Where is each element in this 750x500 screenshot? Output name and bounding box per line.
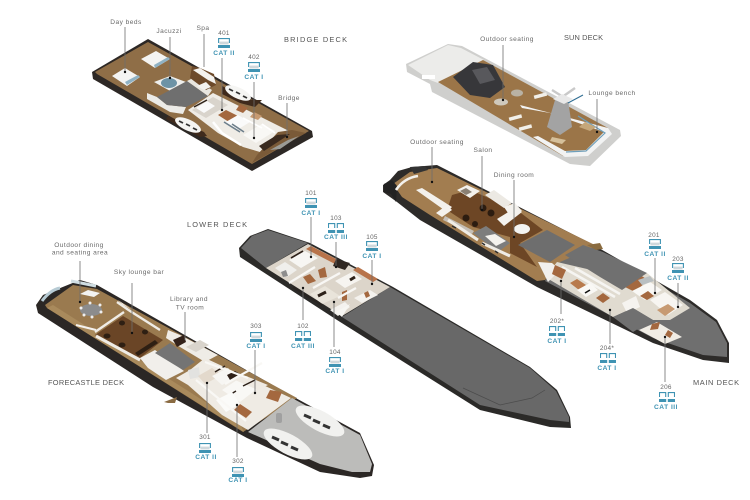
cabin tag: 206: 206 [660, 384, 672, 391]
label: salon: Salon [473, 147, 493, 154]
cabin tag: 105 [362, 234, 382, 285]
label: outdoor seating (main) [410, 139, 464, 183]
label: outdoor dining: Outdoor dining [54, 242, 104, 249]
cabin tag: 204 [597, 309, 617, 372]
cabin tag: 203: 203 [672, 256, 684, 263]
forecastle lower walkway [47, 305, 244, 432]
sun deck hull [406, 44, 621, 166]
main deck salon floor [447, 190, 543, 267]
cabin tag: 102 [291, 287, 315, 350]
sun deck canopy frame [408, 45, 484, 83]
bridge room [252, 130, 306, 163]
forecastle cabins [176, 358, 291, 430]
bridge deck spa [190, 66, 216, 90]
main deck salon furniture [436, 185, 530, 256]
label: sky lounge bar: Sky lounge bar [114, 269, 164, 276]
lower deck cabins [266, 244, 390, 317]
panel: main deck [383, 165, 729, 363]
bridge deck jacuzzi [154, 76, 186, 92]
cabin tag: 303: CAT I [246, 343, 266, 350]
label: bridge: Bridge [278, 95, 300, 102]
cabin tag: 303: 303 [250, 323, 262, 330]
main deck cabin 206 [639, 322, 682, 344]
lower deck stern plating [241, 230, 308, 268]
forecastle library [166, 330, 218, 362]
cabin tag: 201 [644, 232, 666, 294]
sun deck tables and loungers [494, 90, 596, 144]
forecastle tenders [259, 399, 349, 466]
label: spa [196, 25, 210, 67]
bridge deck grey roof [147, 78, 212, 114]
forecastle grey lounge roof [140, 343, 195, 380]
cabin tag: 102: CAT III [291, 343, 315, 350]
panel: sun deck [406, 44, 621, 166]
forecastle aft bench [42, 288, 60, 301]
sun deck mast [547, 88, 583, 135]
forecastle teak [45, 285, 297, 432]
cabin tag: 303 [246, 323, 266, 394]
cabin tag: 206 [654, 336, 678, 411]
cabin tag: 103 [324, 215, 348, 268]
heading: sun deck: SUN DECK [564, 33, 603, 42]
label: outdoor seating (sun): Outdoor seating [480, 36, 534, 43]
cabin tag: 203: CAT II [667, 275, 689, 282]
forecastle bow plating [248, 398, 372, 472]
cabin tag: 101: 101 [305, 190, 317, 197]
main deck grey plating base [545, 246, 727, 357]
bridge deck cabins [188, 93, 293, 152]
cabin tag: 103: 103 [330, 215, 342, 222]
bridge deck hull [92, 39, 313, 171]
label: jacuzzi: Jacuzzi [156, 28, 182, 35]
label: lounge bench [588, 90, 636, 133]
cabin tag: 401 [213, 30, 235, 111]
cabin tag: 102: 102 [297, 323, 309, 330]
forecastle fittings [164, 397, 177, 403]
label: outdoor seating (sun) [480, 36, 534, 101]
label: day beds [110, 19, 142, 73]
cabin tag: 101 [301, 190, 321, 258]
cabin tag: 302 [228, 404, 248, 484]
cabin tag: 201: 201 [648, 232, 660, 239]
label: bridge [278, 95, 300, 138]
label: dining room: Dining room [494, 172, 534, 179]
main deck stern fitting [384, 180, 397, 202]
sun deck teak floor [438, 60, 608, 156]
cabin tag: 204: 204* [600, 345, 614, 352]
sun deck dark canopy [453, 62, 505, 98]
panel: lower deck [239, 229, 571, 428]
cabin tag: 104: CAT I [325, 368, 345, 375]
cabin tag: 202: 202* [550, 318, 564, 325]
cabin tag: 201: CAT II [644, 251, 666, 258]
label: dining room [494, 172, 534, 238]
cabin tag: 202: CAT I [547, 338, 567, 345]
cabin tag: 203 [667, 256, 689, 308]
label: outdoor seating (main): Outdoor seating [410, 139, 464, 146]
lower deck hull [239, 229, 571, 428]
label: jacuzzi [156, 28, 182, 79]
forecastle hull [36, 280, 374, 478]
lower deck main plating [342, 287, 569, 422]
cabin tag: 401: 401 [218, 30, 230, 37]
label: outdoor dining [52, 242, 108, 303]
label: lounge bench: Lounge bench [588, 90, 636, 97]
forecastle lounge floor and furniture [76, 300, 163, 360]
bridge deck teak [95, 42, 309, 164]
cabin tag: 302: 302 [232, 458, 244, 465]
cabin tag: 302: CAT I [228, 477, 248, 484]
cabin tag: 301: CAT II [195, 454, 217, 461]
main deck guest cabins floor [538, 262, 690, 320]
label: outdoor dining: and seating area [52, 250, 108, 256]
cabin tag: 104: 104 [329, 349, 341, 356]
panel: forecastle deck [36, 280, 374, 478]
label: sky lounge bar [114, 269, 164, 334]
bridge deck day beds [112, 51, 170, 86]
cabin tag: 301 [195, 382, 217, 461]
bridge deck dark walkways [222, 86, 262, 107]
main deck outdoor sofas [396, 176, 418, 190]
forecastle outdoor table [80, 290, 102, 318]
main deck hull [383, 165, 729, 363]
cabin tag: 101: CAT I [301, 210, 321, 217]
heading: main deck: MAIN DECK [693, 378, 739, 387]
cabin tag: 401: CAT II [213, 50, 235, 57]
cabin tag: 103: CAT III [324, 234, 348, 241]
main deck grey roofs [518, 230, 647, 290]
label: spa: Spa [196, 25, 210, 32]
cabin tag: 105: CAT I [362, 253, 382, 260]
cabin tag: 105: 105 [366, 234, 378, 241]
bridge deck tender upper [223, 82, 253, 104]
main deck teak [393, 168, 597, 281]
label: library and tv room: Library and [170, 296, 208, 303]
label: library and tv room [170, 296, 208, 340]
bridge deck tender lower [166, 114, 207, 137]
heading: forecastle deck: FORECASTLE DECK [48, 378, 124, 387]
cabin tag: 402 [244, 54, 264, 139]
label: salon [473, 147, 493, 211]
heading: lower deck: LOWER DECK [187, 220, 247, 229]
panel: bridge deck [92, 39, 313, 171]
label: day beds: Day beds [110, 19, 142, 26]
label: library and tv room: TV room [176, 304, 204, 312]
heading: bridge deck: BRIDGE DECK [284, 35, 347, 44]
cabin tag: 104 [325, 301, 345, 375]
main deck forward grey roof [613, 308, 653, 332]
cabin tag: 204: CAT I [597, 365, 617, 372]
cabin tag: 202 [547, 280, 567, 345]
cabin tag: 206: CAT III [654, 404, 678, 411]
cabin tag: 402: CAT I [244, 74, 264, 81]
cabin tag: 402: 402 [248, 54, 260, 61]
cabin tag: 301: 301 [199, 434, 211, 441]
sun deck white bench frame [520, 105, 612, 157]
